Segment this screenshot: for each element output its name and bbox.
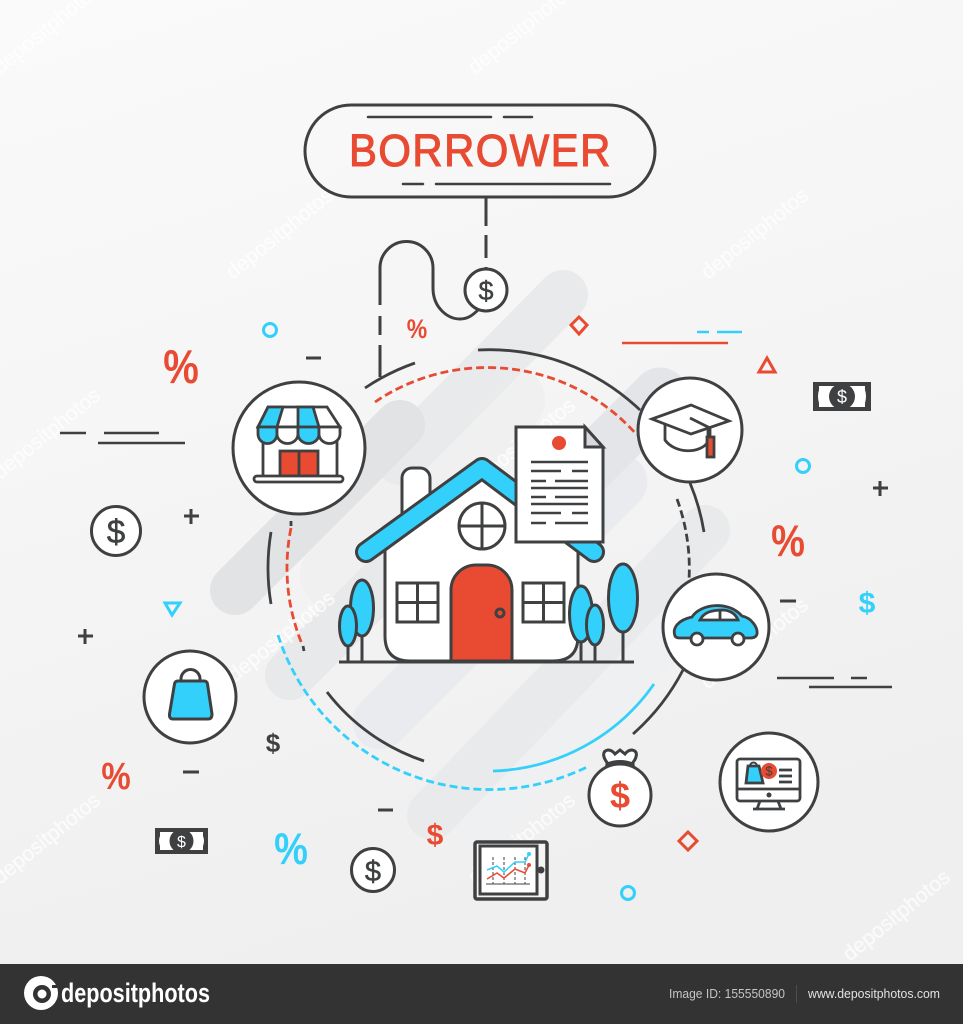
icon: money bag: [589, 750, 651, 826]
icon: shopping bag: [144, 651, 236, 743]
footer logo: depositphotos: [61, 978, 210, 1008]
decorative plus and minus marks: [78, 358, 888, 810]
right window: [523, 583, 564, 622]
dollar signs: [266, 587, 876, 852]
decorative rings: [264, 324, 810, 900]
icon: banknote bottom left: $: [177, 834, 186, 851]
watermark text: depositphotos: [697, 594, 813, 694]
title text: BORROWER: [349, 127, 610, 176]
dollar signs: $: [859, 587, 876, 620]
icon: graduation cap: [638, 378, 742, 482]
ring arcs around house: [268, 350, 704, 790]
coin on connector: [465, 269, 507, 311]
watermark text: depositphotos: [222, 184, 338, 284]
icon: coin bottom: $: [365, 856, 381, 888]
document: [516, 427, 603, 542]
house walls: [385, 478, 578, 661]
footer bar: [0, 964, 963, 1024]
decorative line groups: [60, 332, 892, 687]
icon: store: [233, 382, 365, 514]
decorative diamonds and triangles: [165, 317, 775, 850]
percent signs: %: [407, 316, 427, 344]
dollar signs: $: [427, 819, 444, 852]
title pill: [305, 105, 655, 197]
icon: banknote bottom left: [155, 828, 208, 854]
percent signs: %: [771, 515, 805, 566]
diagonal shadow stripes: [235, 295, 705, 815]
icon: coin left: [92, 506, 140, 556]
icon: tablet chart: [475, 842, 547, 899]
icon: coin left: $: [107, 513, 125, 550]
footer website: www.depositphotos.com: [807, 987, 940, 1001]
percent signs: %: [274, 823, 308, 874]
watermark text: depositphotos: [697, 184, 813, 284]
icon: car: [663, 574, 769, 680]
house illustration: [339, 468, 638, 662]
trees and ground: [339, 564, 638, 662]
footer image id: Image ID: 155550890: [669, 987, 785, 1001]
dollar signs: $: [266, 728, 281, 758]
percent signs: %: [163, 341, 199, 394]
icon: money bag: $: [610, 775, 630, 816]
door: [451, 565, 512, 661]
icon: banknote top right: [813, 382, 871, 411]
roof: [366, 468, 594, 552]
watermark text: depositphotos: [224, 587, 340, 687]
left window: [397, 583, 438, 622]
chimney: [402, 468, 430, 515]
watermark text: depositphotos: [839, 866, 955, 966]
round window: [459, 503, 505, 549]
percent signs: [101, 316, 805, 874]
icon: online shop monitor: $: [765, 764, 773, 778]
coin on connector: $: [478, 276, 494, 306]
watermark text: depositphotos: [464, 394, 580, 494]
connector from title to coin: [380, 197, 486, 377]
icon: banknote top right: $: [837, 387, 847, 407]
footer logo: [24, 976, 210, 1010]
watermark text: depositphotos: [464, 789, 580, 889]
icon: coin bottom: [352, 848, 394, 892]
icon: online shop monitor: [720, 733, 818, 831]
percent signs: %: [101, 755, 131, 798]
